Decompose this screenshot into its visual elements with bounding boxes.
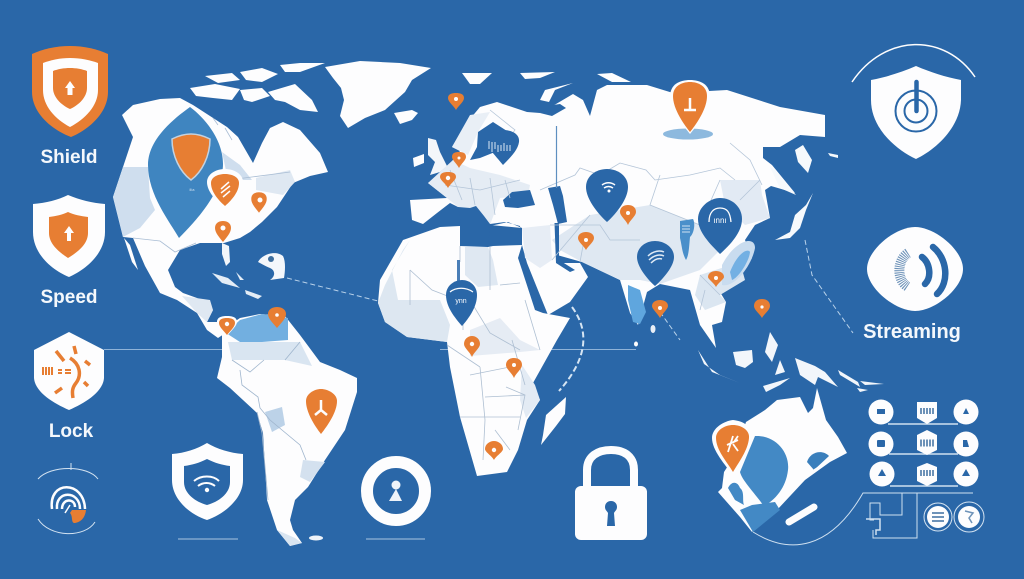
icon: orange burst: [43, 346, 90, 398]
borders: [133, 118, 290, 252]
pin: Sahara: [446, 260, 477, 326]
pin: East Asia: [698, 198, 742, 254]
orange map pins: [207, 93, 770, 460]
icon and label: speed: [33, 195, 105, 308]
row 3: [870, 462, 978, 486]
large blue region marker: north america: [148, 107, 223, 238]
south america: [217, 314, 357, 546]
pin: India: [637, 241, 674, 286]
madagascar: [541, 397, 566, 445]
row lines: [888, 424, 958, 486]
dashed route lines: [287, 240, 853, 340]
pin: light blue tall: [680, 219, 694, 260]
pin: South China: [708, 271, 724, 287]
seas: [458, 104, 575, 277]
pin: East Asia: ınnı: [713, 216, 727, 225]
pin: South Africa: [485, 441, 503, 460]
pin: Philippines: [754, 299, 770, 318]
japan, sakhalin and kamchatka: [770, 145, 838, 240]
icon: marker on caribbean: [258, 253, 285, 280]
vertical map line: [556, 126, 558, 188]
label: Streaming: [863, 321, 961, 343]
icon: orange shield: [172, 134, 210, 180]
icon and label: shield: [32, 46, 108, 168]
africa: [378, 226, 656, 476]
schematic outline: [866, 493, 917, 538]
wifi symbol: [194, 476, 219, 486]
pin: Central Asia: [586, 169, 628, 222]
label: Lock: [49, 421, 94, 442]
marker: Australia: [712, 420, 752, 475]
large orange markers: [306, 80, 752, 475]
australia: [718, 388, 973, 545]
pin: Kazakhstan: [620, 205, 636, 225]
arctic islands: [190, 63, 325, 112]
pin: Sahara: ynn: [455, 298, 467, 305]
pin: USA east: [251, 192, 267, 213]
pin: Bay of Bengal: [652, 300, 668, 318]
icon: padlock: [575, 450, 647, 540]
underline: [178, 538, 238, 540]
row 2: [868, 430, 978, 456]
caribbean islands: [212, 272, 262, 299]
pin: Scandinavia: [485, 130, 519, 165]
sound arcs: [922, 247, 945, 294]
pin: East Africa: [506, 358, 522, 378]
row 1: [868, 400, 978, 424]
world map: [104, 61, 973, 546]
iceland and british isles: [394, 72, 631, 175]
pin: Iran: [578, 232, 594, 250]
server grid legend: [866, 400, 984, 538]
greenland: [325, 61, 431, 128]
pin: Central America: [217, 316, 237, 336]
pin: USA southeast: [215, 221, 231, 242]
icon and label: streaming: [863, 227, 963, 343]
marker: Russia: [663, 80, 713, 140]
southeast asia and indonesia: [698, 332, 884, 392]
icon: shield with wifi: [172, 443, 243, 539]
marker: Brazil: [306, 389, 337, 434]
borders: [445, 110, 762, 310]
pin: Netherlands: [452, 152, 466, 168]
icon: fingerprint dial: [38, 463, 98, 534]
icon: power shield: [852, 45, 975, 159]
blue map pins: [446, 130, 742, 326]
pin: West Africa: [464, 336, 480, 357]
eurasia: [410, 85, 825, 348]
pin: Venezuela: [268, 307, 286, 328]
icon: arrow: [64, 226, 74, 241]
pill: [789, 507, 814, 522]
icon: circle with keyhole person: [366, 462, 425, 539]
round badges: [924, 502, 984, 532]
equator line: [104, 348, 636, 350]
label: Speed: [40, 287, 98, 308]
underline: [366, 538, 425, 540]
icon: arrow: [65, 81, 75, 95]
north america: [113, 63, 328, 338]
label: Shield: [40, 147, 98, 168]
icon and label: lock: [34, 332, 104, 442]
pin: France: [440, 172, 456, 188]
pin: USA large: [207, 169, 243, 209]
connector line: [753, 493, 973, 545]
small label: ilia: [190, 187, 195, 192]
pin: Atlantic north: [448, 93, 464, 110]
tinted regions: [428, 112, 770, 324]
